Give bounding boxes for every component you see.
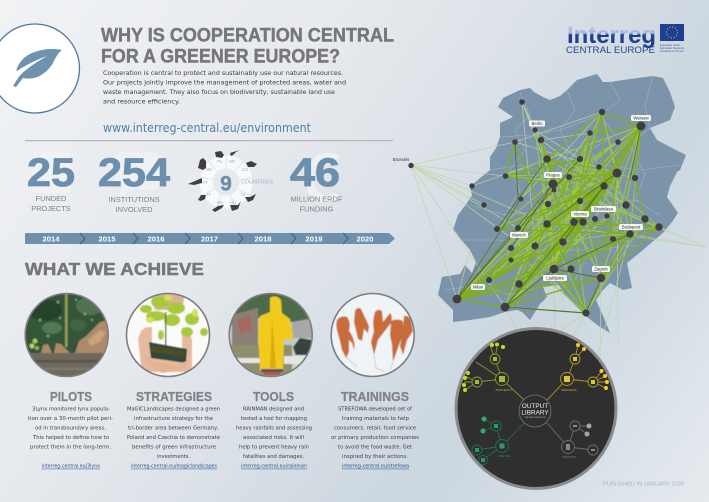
timeline: 2019	[306, 234, 322, 243]
panel: strategies: tri-border area between Germany,	[128, 426, 219, 432]
logo: Interreg Central Europe: CENTRAL EUROPE	[566, 45, 655, 56]
stat: 9 countries ring: HR	[229, 159, 236, 164]
panel: tools: interreg-central.eu/rainman	[241, 464, 307, 470]
stat: 9 countries ring: SK	[217, 200, 224, 205]
map: city labels: Munich	[512, 233, 527, 238]
branch captions: BIODIVERSITY	[496, 389, 513, 392]
panel: strategies: interreg-central.eu/magiclandscapes	[131, 464, 217, 470]
output library hub: OUTPUT	[522, 403, 548, 410]
panel: tools: associated risks. It will	[243, 435, 304, 441]
panel: strategies: benefits of green infrastructure	[132, 445, 217, 451]
stat: funded projects: PROJECTS	[31, 204, 71, 213]
photo: trainings carrots	[330, 293, 416, 377]
panel: tools: heavy rainfalls and assessing	[236, 426, 312, 432]
panel: pilots: This helped to define how to	[32, 435, 110, 441]
photo: pilots lynx	[24, 292, 110, 378]
stat: 9 countries ring: PL	[217, 159, 223, 164]
panel: pilots: tion over a 30-month pilot peri-	[28, 416, 113, 422]
stat: 9 countries ring: DE	[206, 167, 212, 172]
icon: leaf badge	[0, 24, 80, 113]
links: bright green	[457, 112, 659, 313]
panel: pilots	[28, 389, 113, 470]
intro text: Our projects jointly improve the management of protected areas, water and	[103, 78, 346, 86]
panel: strategies	[127, 389, 221, 470]
title	[101, 26, 394, 68]
panel: trainings: TRAININGS	[341, 389, 409, 404]
panel: strategies: infrastructure strategy for the	[134, 416, 214, 422]
panel: trainings: to avoid the food waste. Get	[338, 445, 413, 451]
panel: trainings: consumers, retail, food service	[334, 426, 417, 432]
panel: tools: fatalities and damages.	[243, 454, 304, 460]
logo: Interreg Central Europe: European Union	[660, 43, 681, 47]
map: city labels: Vienna	[573, 212, 587, 217]
stat: funded projects: FUNDED	[36, 194, 66, 203]
timeline: 2014	[43, 234, 60, 243]
stat: 9 countries ring: SI	[241, 192, 245, 197]
panel: trainings: or primary production companies	[331, 435, 419, 441]
stat: ERDF funding	[290, 151, 343, 214]
panel: strategies: Poland and Czechia to demonstrate	[127, 435, 221, 441]
photo: tools raincoat	[228, 293, 314, 377]
map: city labels: Brussels	[393, 157, 409, 162]
stat: funded projects: 25	[27, 151, 75, 195]
stat: 9 countries ring: 9	[220, 172, 232, 196]
timeline	[25, 233, 395, 244]
intro text: waste management. They also focus on biodiversity, sustainable land use	[103, 88, 335, 96]
timeline: 2018	[255, 234, 271, 243]
panel: pilots: od in transboundary areas.	[35, 426, 106, 432]
map: city labels: Budapest	[622, 225, 641, 230]
intro text: and resource efficiency.	[103, 98, 180, 106]
map: city labels: Prague	[546, 173, 561, 178]
panel: trainings: interreg-central.eu/strefowa	[342, 464, 409, 470]
links: light green mesh	[457, 112, 659, 313]
links: dark olive	[457, 126, 641, 313]
panel: pilots: protect them in the long-term.	[30, 445, 111, 451]
output library hub: LIBRARY	[521, 409, 549, 416]
links: faint long-range	[411, 102, 706, 370]
stat: institutions involved	[98, 151, 171, 214]
map: city labels	[393, 115, 651, 290]
branch captions	[496, 389, 577, 459]
output library hub: PROJECT RESULTS	[525, 417, 546, 419]
panel: tools	[236, 389, 312, 470]
stat: 9 countries ring: CZ	[242, 167, 248, 172]
logo: Interreg Central Europe	[566, 22, 684, 56]
website link: www.interreg-central.eu/environment	[103, 121, 311, 135]
intro text	[103, 69, 346, 106]
panel: tools: tested a tool for mapping	[241, 416, 307, 422]
map: city labels: Milan	[473, 285, 484, 290]
branch: transport grey	[547, 421, 598, 455]
map: city labels: Ljubljana	[546, 276, 564, 281]
photo: strategies plant	[126, 293, 210, 377]
map: city labels: Warsaw	[633, 116, 650, 121]
stat: ERDF funding: MILLION ERDF	[291, 194, 343, 204]
intro text: Cooperation is central to protect and sustainably use our natural resources.	[103, 69, 343, 77]
branch captions: TRANSPORT	[562, 456, 577, 459]
logo: Interreg Central Europe: Interreg	[567, 22, 656, 49]
stat: 9 countries ring	[188, 150, 273, 212]
panel: pilots: 3Lynx monitored lynx popula-	[32, 406, 110, 412]
panel: trainings: training materials to help	[342, 416, 409, 422]
map: project nodes	[408, 99, 663, 317]
map: city labels: Zagreb	[594, 267, 608, 272]
title: WHY IS COOPERATION CENTRAL	[101, 26, 394, 47]
logo: Interreg Central Europe: European Regional	[660, 46, 684, 50]
branch captions: RESOURCES	[561, 389, 577, 392]
icon: country silhouettes	[188, 150, 257, 212]
branch: resources yellow	[547, 343, 609, 400]
stat: 9 countries ring: HU	[230, 200, 236, 205]
title: FOR A GREENER EUROPE?	[101, 46, 340, 68]
stat: funded projects	[27, 151, 75, 213]
stat: 9 countries ring: AT	[202, 180, 208, 185]
panel: trainings: inspired by their actions.	[342, 454, 408, 460]
heading: what we achieve: WHAT WE ACHIEVE	[25, 259, 204, 279]
panel: strategies: investments.	[157, 454, 190, 460]
panel: strategies: MaGICLandscapes designed a green	[127, 406, 220, 412]
publication note: PUBLISHED IN JANUARY 2020	[603, 482, 684, 488]
branch: biodiversity lime	[462, 342, 524, 400]
stat: institutions involved: 254	[98, 151, 171, 195]
stat: 9 countries ring: IT	[207, 192, 211, 197]
map: region borders	[445, 76, 680, 310]
panel: tools: help to prevent heavy rain	[239, 445, 309, 451]
network: project links	[411, 102, 706, 370]
map: central europe regions	[438, 74, 686, 333]
timeline: 2017	[201, 234, 218, 243]
timeline: 2016	[148, 234, 164, 243]
panel: pilots: interreg-central.eu/3lynx	[42, 464, 100, 470]
stat: institutions involved: INVOLVED	[116, 205, 152, 214]
branch: land use green	[472, 416, 524, 464]
map: city labels: Berlin	[532, 121, 543, 126]
stat: 9 countries ring: COUNTRIES	[241, 180, 273, 186]
stat: institutions involved: INSTITUTIONS	[108, 195, 160, 204]
output library diagram	[456, 328, 616, 488]
panel: tools: TOOLS	[253, 389, 294, 404]
timeline: 2015	[99, 234, 116, 243]
logo: Interreg Central Europe: Development Fund	[660, 49, 684, 53]
panel: strategies: STRATEGIES	[136, 389, 212, 404]
panel: trainings: STREFOWA developed set of	[338, 406, 413, 412]
stat: ERDF funding: FUNDING	[300, 204, 334, 214]
panel: pilots: PILOTS	[50, 389, 92, 404]
output library hub	[519, 395, 551, 427]
stat: ERDF funding: 46	[290, 151, 340, 195]
map: city labels: Bratislava	[594, 207, 614, 212]
panel: trainings	[331, 389, 419, 470]
panel: tools: RAINMAN designed and	[243, 406, 304, 412]
timeline: 2020	[357, 234, 373, 243]
branch captions: LAND USE	[498, 455, 510, 458]
